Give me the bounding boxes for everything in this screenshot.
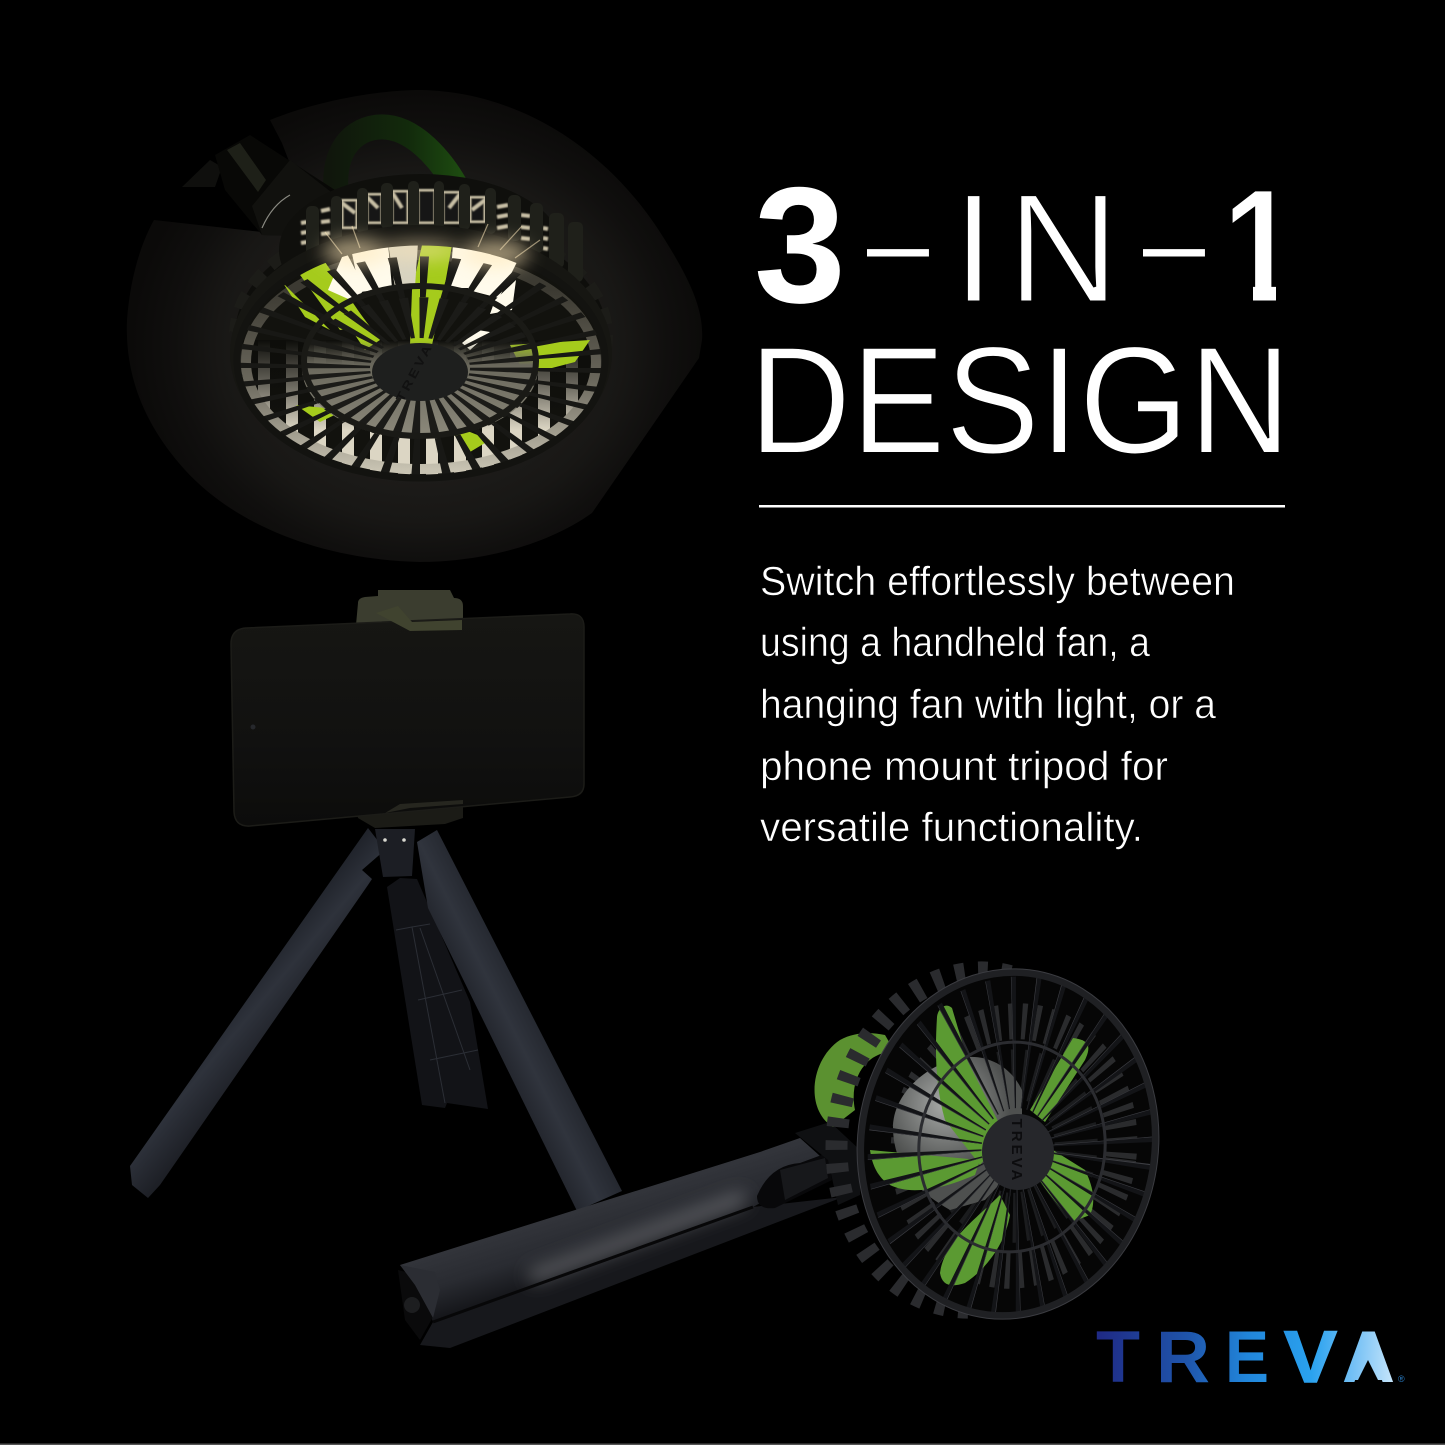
outer rim edge <box>237 242 605 478</box>
left leg <box>130 828 385 1198</box>
window braces <box>301 192 548 249</box>
photo: handheld fan <box>398 951 1179 1348</box>
green strap <box>815 1033 895 1127</box>
inner back grille <box>944 1067 1084 1225</box>
spoke highlights <box>913 1032 1119 1264</box>
title: 1 <box>1222 154 1298 337</box>
TREVA logo: A <box>1342 1317 1395 1398</box>
light bloom <box>323 238 529 268</box>
sunburst glints <box>325 224 540 258</box>
drum ribs <box>306 181 583 282</box>
photo: hanging fan with light <box>127 90 702 562</box>
bottom edge line <box>0 1444 1445 1445</box>
inner ring <box>907 1031 1117 1263</box>
fan hub with logo <box>982 1114 1054 1190</box>
bracket arm <box>215 135 335 236</box>
description text: hanging fan with light, or a <box>760 681 1216 727</box>
clamp tab <box>376 606 462 631</box>
right leg <box>417 830 622 1211</box>
description text: using a handheld fan, a <box>760 619 1150 665</box>
lit drum windows <box>342 190 485 228</box>
back ridges <box>818 956 1132 1324</box>
title <box>749 153 1306 486</box>
title: 3 <box>754 153 846 337</box>
bottom clamp <box>355 800 463 828</box>
fan internals <box>870 1006 1136 1285</box>
side ridges <box>235 217 607 453</box>
lamp dome <box>893 1057 1022 1210</box>
description text: versatile functionality. <box>760 804 1143 850</box>
fan hub with logo: TREVA <box>1008 1119 1025 1183</box>
inner ring <box>304 286 536 436</box>
TREVA logo <box>1096 1317 1405 1398</box>
glow halo behind fan <box>127 90 702 562</box>
rear leg <box>387 878 488 1109</box>
halo fragment <box>182 160 222 187</box>
inner lit annulus <box>302 342 538 433</box>
interior <box>840 954 1176 1334</box>
photo: phone mount tripod <box>130 590 622 1211</box>
divider <box>759 505 1285 508</box>
back grille <box>892 1009 1136 1283</box>
title: N <box>1007 162 1120 336</box>
fan hub with logo <box>372 340 468 404</box>
clamp tab lower <box>385 800 463 813</box>
outer spokes <box>268 277 572 459</box>
title: – <box>867 182 930 305</box>
top clamp <box>356 590 463 632</box>
fan blades <box>870 1006 1093 1285</box>
TREVA logo: ® <box>1398 1374 1405 1384</box>
description text <box>760 558 1235 850</box>
tripod hinge <box>375 829 415 877</box>
TREVA logo: V <box>1284 1317 1337 1398</box>
green blades <box>283 245 590 452</box>
lit lower slats <box>240 344 602 474</box>
bright light panels <box>328 243 520 350</box>
grey lamp panel <box>388 246 418 285</box>
phone <box>231 614 584 826</box>
outer lit band <box>246 255 596 469</box>
title: I <box>952 162 995 336</box>
rim <box>837 951 1179 1337</box>
fan hub with logo: TREVA <box>393 340 436 404</box>
hanging strap <box>336 127 458 190</box>
fan handle <box>398 1122 860 1348</box>
TREVA logo: E <box>1225 1317 1269 1398</box>
description text: phone mount tripod for <box>760 743 1168 789</box>
fan front rim <box>230 225 612 481</box>
fan interior <box>230 243 610 480</box>
title: DESIGN <box>749 315 1291 486</box>
spokes <box>913 1032 1119 1264</box>
drum dome <box>279 174 563 326</box>
TREVA logo: T <box>1096 1317 1140 1398</box>
description text: Switch effortlessly between <box>760 558 1235 604</box>
TREVA logo: R <box>1156 1317 1210 1398</box>
title: – <box>1143 182 1206 305</box>
inner spokes <box>336 318 504 418</box>
